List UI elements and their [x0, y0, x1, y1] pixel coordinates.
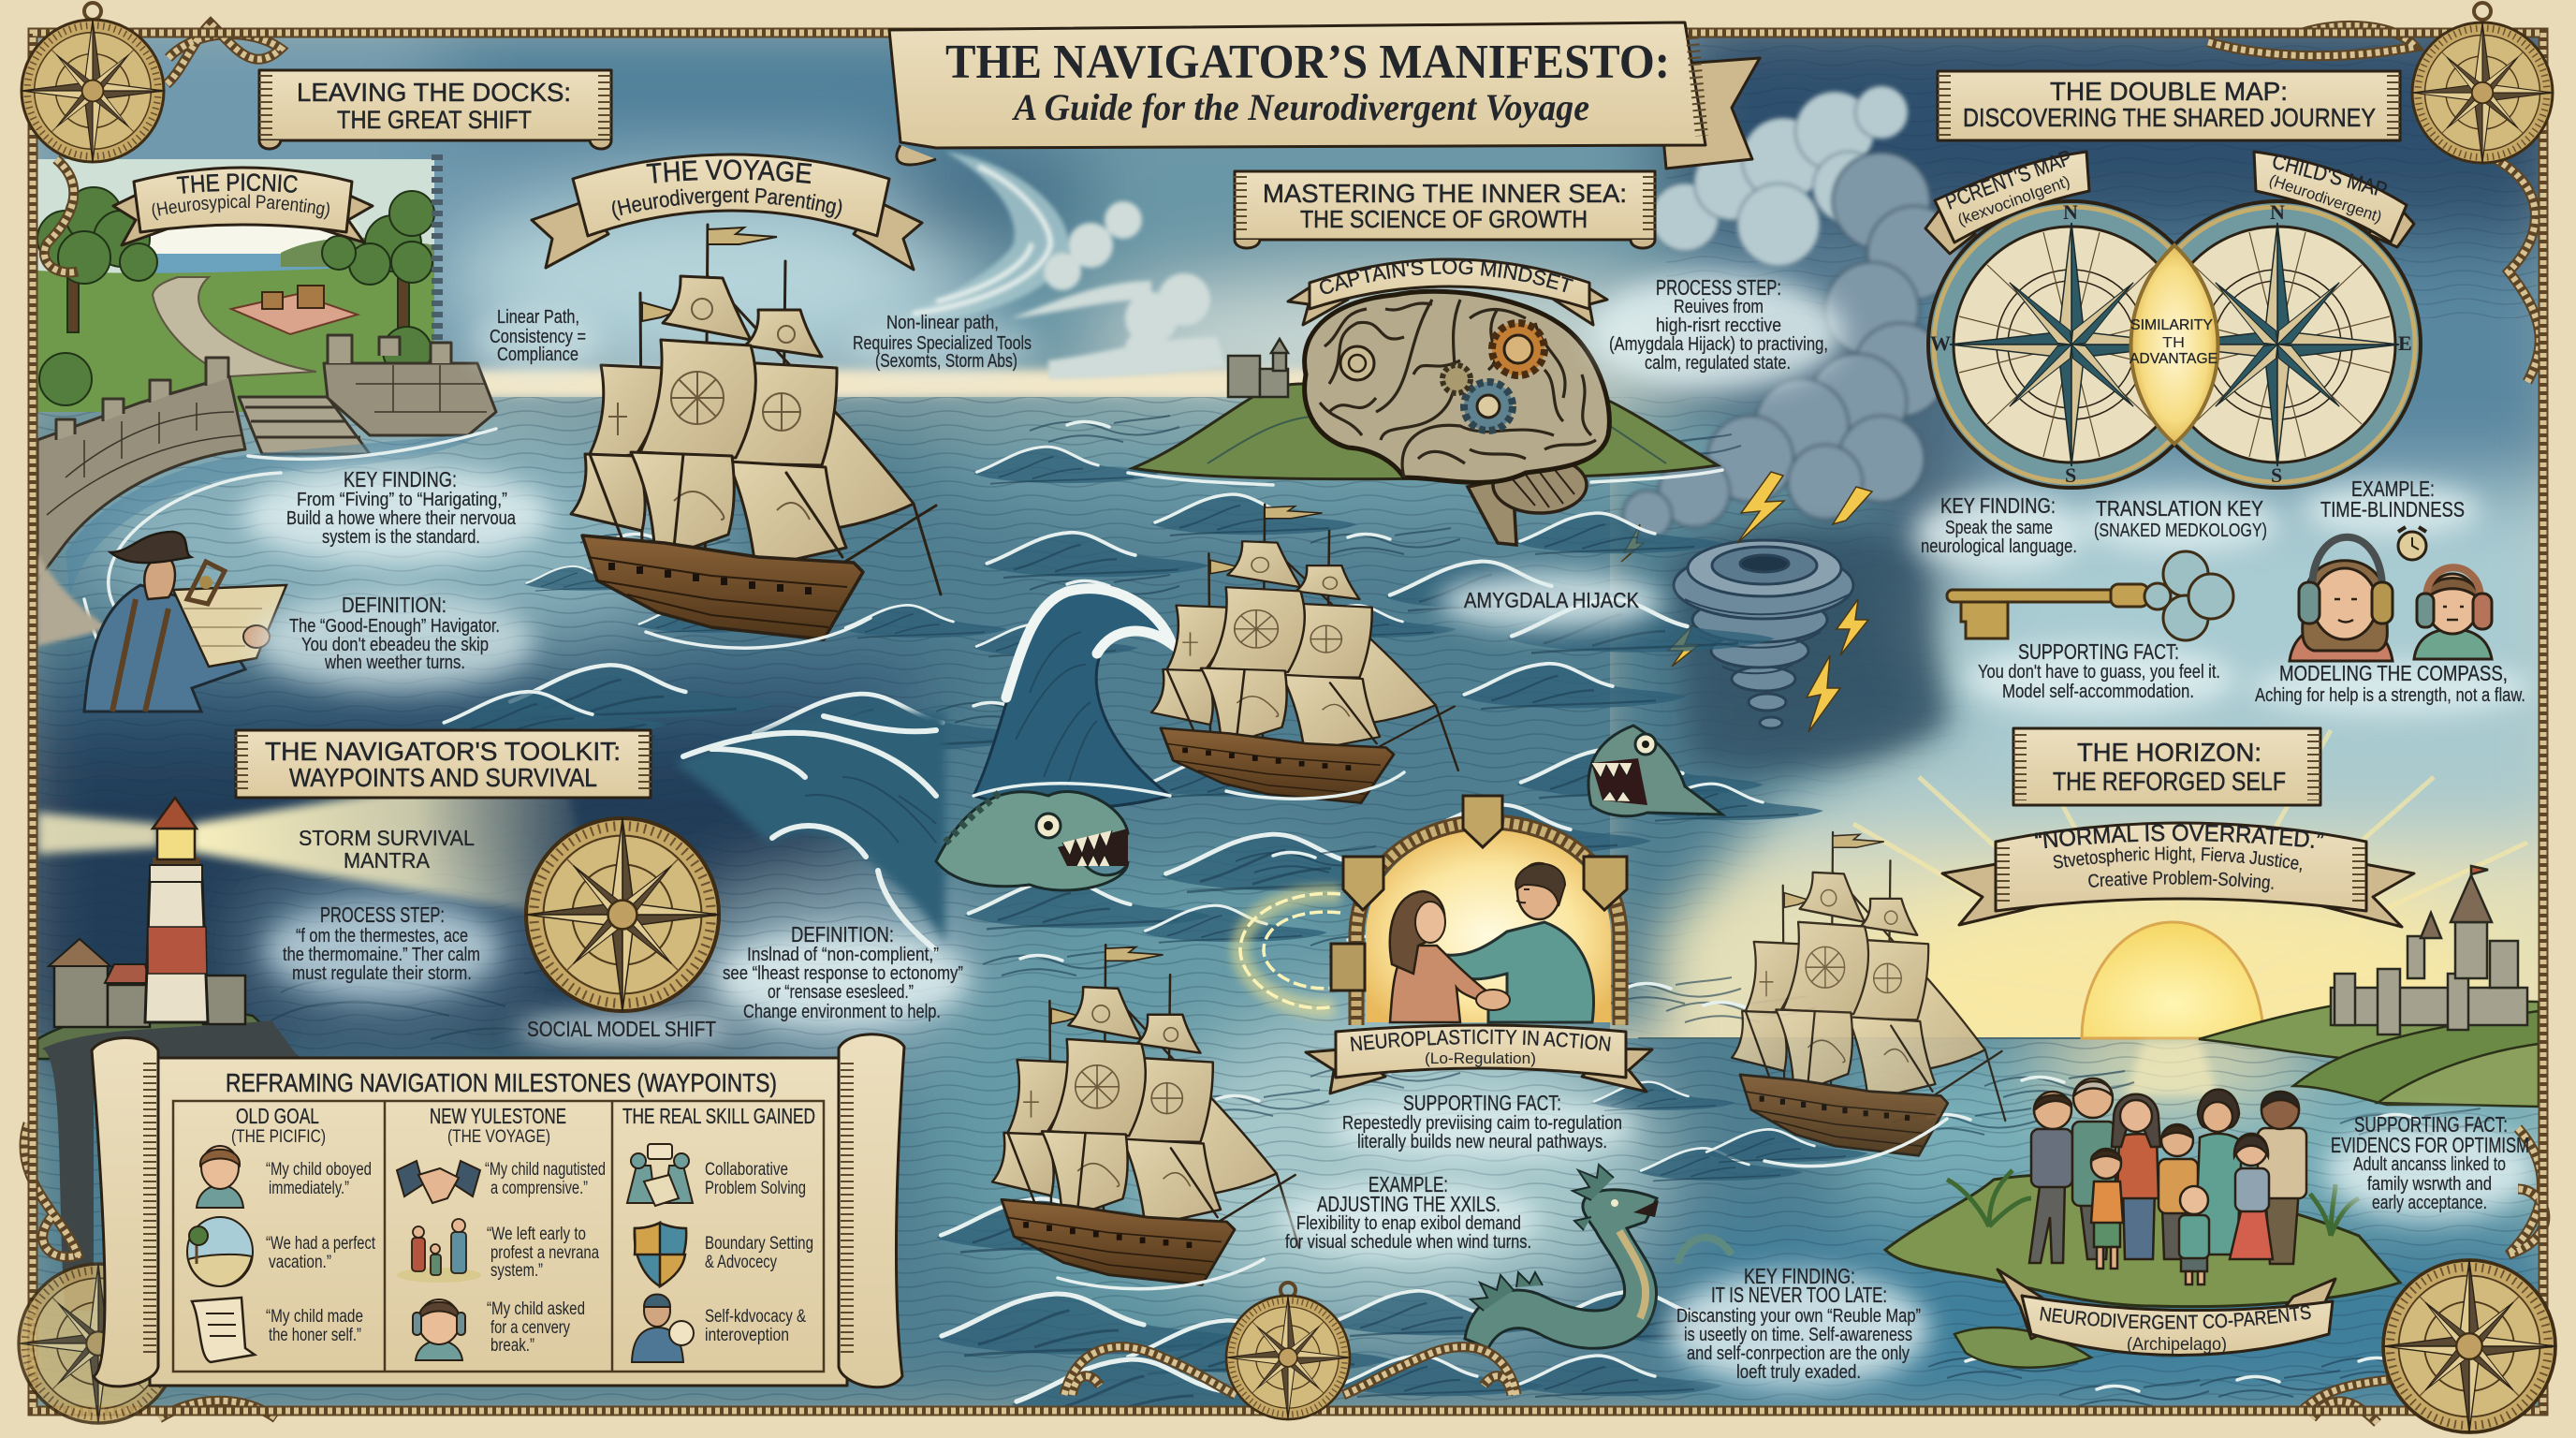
text: linear path: Linear Path,	[497, 307, 579, 328]
striped pole	[432, 154, 443, 374]
compass points: S	[2271, 463, 2282, 487]
label: social model shift: SOCIAL MODEL SHIFT	[527, 1017, 716, 1041]
island plants	[1947, 1170, 2359, 1236]
horizon glow	[440, 370, 1376, 398]
icon: island castle	[1228, 339, 1288, 397]
island: brain isle	[1128, 384, 1722, 485]
column: old goal: (THE PICIFIC)	[231, 1127, 326, 1147]
compass: bottom centre	[1226, 1283, 1350, 1419]
column: real skill gained: & Advocecy	[705, 1253, 777, 1272]
banner: neurodivergent co-parents: (Archipelago)	[2127, 1335, 2227, 1355]
text: process step, toolkit: the thermomaine.” Ther calm	[283, 945, 480, 965]
label: amygdala hijack: AMYGDALA HIJACK	[1464, 588, 1640, 612]
banner: neuroplasticity in action: (Lo-Regulation)	[1425, 1049, 1536, 1067]
column: new milestone: (THE VOYAGE)	[447, 1127, 550, 1147]
left roller	[92, 1037, 158, 1387]
ribbon: child's map	[2254, 149, 2414, 247]
ribbon: parent's map: PCRENT'S MAP	[1945, 151, 2070, 210]
text: non-linear path: Requires Specialized Tools	[853, 333, 1032, 354]
storm clouds	[1623, 153, 1961, 539]
text: supporting fact, neuroplasticity	[1342, 1091, 1622, 1152]
text: linear path: Consistency =	[490, 327, 586, 347]
text: example, adjusting the sails: EXAMPLE:	[1368, 1172, 1448, 1196]
compass: top left	[22, 3, 164, 162]
column: new milestone: “My child asked	[487, 1299, 585, 1319]
lighthouse and buildings	[37, 798, 300, 1311]
text: supporting fact, double map	[1978, 639, 2220, 702]
icon: child with headphones	[2414, 567, 2492, 659]
shore foam	[84, 429, 496, 674]
lighthouse beam	[37, 763, 599, 922]
banner: neurodivergent co-parents	[1998, 1269, 2335, 1356]
text glows	[242, 274, 2536, 1387]
trees	[37, 187, 434, 405]
text: process step, inner sea	[1609, 275, 1828, 374]
text: key finding, double map: neurological language.	[1921, 536, 2077, 557]
text: storm survival mantra	[299, 826, 475, 873]
column: real skill gained: THE REAL SKILL GAINED	[622, 1104, 815, 1128]
text: example, adjusting the sails: Flexibility to enap exibol demand	[1296, 1213, 1521, 1234]
sea monster left	[936, 791, 1128, 890]
text: translation key	[2094, 496, 2267, 541]
horizon hills	[2199, 999, 2539, 1107]
text: example, adjusting the sails: ADJUSTING THE XXILS.	[1317, 1192, 1500, 1216]
text: supporting fact, double map: Model self-accommodation.	[2002, 682, 2194, 702]
table heading: REFRAMING NAVIGATION MILESTONES (WAYPOINTS)	[226, 1068, 777, 1097]
compass points	[1930, 200, 2412, 487]
banner: navigator's toolkit	[236, 730, 651, 798]
family group	[2029, 1078, 2306, 1284]
navigator figure	[84, 532, 286, 712]
text: definition, social model	[723, 922, 963, 1022]
column: old goal: “My child made	[266, 1307, 363, 1327]
banner: captain's log mindset: CAPTAIN'S LOG MINDSET	[1316, 255, 1575, 301]
text: example, time-blindness	[2320, 477, 2465, 521]
banner: the horizon: THE REFORGED SELF	[2053, 767, 2286, 796]
column: new milestone: NEW YULESTONE	[430, 1104, 566, 1128]
text: process step, inner sea: calm, regulated state.	[1645, 353, 1791, 374]
father	[1446, 922, 1593, 1022]
text: supporting fact, double map: SUPPORTING FACT:	[2018, 639, 2179, 664]
banner: mastering the inner sea	[1235, 171, 1655, 248]
thin ripples	[505, 416, 2490, 1406]
compass points: E	[2398, 331, 2412, 355]
banner: captain's log mindset	[1288, 255, 1607, 325]
text: storm survival mantra: STORM SURVIVAL	[299, 826, 475, 850]
text: storm survival mantra: MANTRA	[344, 848, 431, 873]
compass points: N	[2270, 200, 2285, 224]
banner: the double map: DISCOVERING THE SHARED JOURNEY	[1963, 103, 2376, 132]
text: definition, social model: see “lheast response to ectonomy”	[723, 963, 963, 984]
column: old goal: vacation.”	[269, 1253, 331, 1272]
ship: lower sea	[992, 945, 1299, 1284]
column: old goal: the honer self.”	[269, 1326, 361, 1345]
sea colour wash	[0, 393, 2576, 1438]
text: key finding, double map: KEY FINDING:	[1940, 493, 2056, 518]
sea waves	[440, 445, 1868, 1421]
icon: translation key	[1947, 551, 2233, 640]
text: process step, toolkit	[283, 902, 480, 984]
text: process step, inner sea: (Amygdala Hijack) to practiving,	[1609, 334, 1828, 355]
text: linear path	[490, 307, 586, 365]
compass: social model shift	[526, 818, 719, 1011]
compass: bottom left	[19, 1264, 178, 1423]
column: new milestone	[397, 1104, 606, 1360]
icon: smiling boy	[197, 1146, 243, 1208]
compass: top right	[2412, 3, 2553, 163]
text: key finding, docks: Build a howe where their nervoua	[286, 508, 517, 529]
banner: neuroplasticity in action	[1306, 1025, 1652, 1093]
text: non-linear path: (Sexomts, Storm Abs)	[875, 351, 1017, 372]
icon: child in headphones	[413, 1299, 465, 1360]
text: definition, social model: Inslnad of “non-complient,”	[747, 945, 939, 965]
double map compasses	[1928, 200, 2421, 488]
icon: beach	[187, 1217, 253, 1286]
column: new milestone: “We left early to	[487, 1225, 586, 1244]
banner: neurodivergent co-parents: NEURODIVERGENT CO-PARENTS	[2038, 1301, 2313, 1334]
text: process step, inner sea: PROCESS STEP:	[1656, 275, 1781, 300]
ship wakes	[646, 618, 1947, 1289]
icon: collaboration	[627, 1144, 693, 1206]
text: key finding, double map	[1921, 493, 2077, 557]
sun rays	[1853, 730, 2527, 1008]
banner: the horizon: THE HORIZON:	[2077, 738, 2261, 767]
lens label	[2130, 317, 2217, 367]
neural pathway glow	[1240, 893, 1340, 1008]
text: supporting fact, optimism: Adult ancanss linked to	[2353, 1154, 2506, 1175]
brain with gears	[1305, 291, 1609, 545]
shore rock	[37, 552, 108, 646]
text: supporting fact, neuroplasticity: literally builds new neural pathways.	[1357, 1132, 1607, 1152]
text: process step, toolkit: PROCESS STEP:	[320, 902, 445, 927]
ship: horizon	[1732, 832, 2005, 1155]
banner: the horizon	[2013, 728, 2320, 805]
text: definition, navigator: when weether turns.	[324, 653, 465, 673]
text: definition, social model: or “rensase esesleed.”	[768, 982, 914, 1003]
text: process step, toolkit: must regulate their storm.	[292, 963, 472, 984]
text: key finding, docks	[286, 467, 517, 548]
text: supporting fact, optimism	[2331, 1112, 2529, 1213]
text: key finding, docks: KEY FINDING:	[344, 467, 457, 492]
sky colour wash	[37, 37, 2539, 1037]
banner: the double map	[1938, 71, 2400, 140]
text: example, time-blindness: EXAMPLE:	[2351, 477, 2435, 501]
column: new milestone: for a cenvery	[490, 1318, 570, 1338]
text: process step, toolkit: “f om the thermestes, ace	[296, 926, 468, 946]
clasped hands	[1476, 990, 1510, 1010]
column: real skill gained	[622, 1104, 815, 1362]
column: real skill gained: interoveption	[705, 1326, 789, 1345]
big curling wave	[973, 586, 1175, 809]
text: linear path: Compliance	[497, 345, 578, 365]
text: non-linear path: Non-linear path,	[886, 313, 999, 333]
picnic path	[153, 277, 316, 376]
milestones table frame	[173, 1101, 824, 1372]
text: key finding, never too late: and self-conrpection are the only	[1687, 1343, 1910, 1364]
text: key finding, never too late: IT IS NEVER TOO LATE:	[1711, 1283, 1887, 1307]
text: key finding, never too late: Discansting your own “Reuble Map”	[1676, 1306, 1921, 1327]
column: new milestone: system.”	[490, 1261, 543, 1281]
banner: leaving the docks: THE GREAT SHIFT	[337, 106, 532, 134]
title text: THE NAVIGATOR’S MANIFESTO:	[945, 36, 1670, 89]
lens label: ADVANTAGE	[2130, 351, 2217, 367]
banner: the voyage: THE VOYAGE	[646, 154, 813, 190]
compass points: W	[1930, 331, 1951, 355]
icon: family on beach	[397, 1219, 481, 1283]
text: translation key: TRANSLATION KEY	[2096, 496, 2263, 521]
text: key finding, docks: system is the standard.	[322, 527, 480, 548]
icon: report card scroll	[192, 1298, 255, 1362]
text: example, adjusting the sails	[1285, 1172, 1531, 1253]
text: modeling the compass: MODELING THE COMPASS,	[2279, 661, 2508, 685]
text: non-linear path	[853, 313, 1032, 372]
banner: mastering the inner sea: MASTERING THE INNER SEA:	[1263, 179, 1627, 208]
sky hatching	[1666, 37, 2537, 318]
ribbon: child's map: (Heurodivergent)	[2269, 174, 2381, 225]
banner: leaving the docks: LEAVING THE DOCKS:	[297, 78, 571, 107]
text: modeling the compass: Aching for help is a strength, not a flaw.	[2255, 685, 2525, 706]
family island	[1885, 1175, 2400, 1307]
text: supporting fact, neuroplasticity: SUPPORTING FACT:	[1403, 1091, 1561, 1115]
text: definition, navigator: The “Good-Enough” Havigator.	[289, 616, 500, 637]
ribbon: child's map: CHILD'S MAP	[2273, 154, 2387, 196]
column: new milestone: break.”	[490, 1336, 534, 1356]
text: process step, inner sea: high-risrt recctive	[1656, 315, 1781, 336]
horizon castle	[2331, 866, 2527, 1034]
text: definition, navigator	[289, 593, 500, 673]
subtitle text: A Guide for the Neurodivergent Voyage	[1011, 86, 1589, 128]
compass points: S	[2065, 463, 2076, 487]
picnic blanket	[231, 294, 358, 334]
column: old goal: “My child oboyed	[266, 1160, 372, 1180]
text: modeling the compass	[2255, 661, 2525, 706]
text: process step, inner sea: Reuives from	[1674, 297, 1764, 317]
column: old goal: immediately.”	[269, 1179, 349, 1198]
banner: the voyage: (Heurodivergent Parenting)	[608, 183, 845, 222]
lens label: TH	[2162, 335, 2185, 351]
arch shields	[1463, 796, 1502, 847]
overlap lens	[2130, 245, 2218, 444]
column: new milestone: a comprensive.”	[490, 1179, 588, 1198]
column: real skill gained: Self-kdvocacy &	[705, 1307, 806, 1327]
column: old goal: “We had a perfect	[266, 1234, 376, 1254]
icon: person with clock	[632, 1294, 694, 1362]
text: definition, navigator: You don't ebeadeu the skip	[301, 635, 489, 655]
scroll: reframing navigation milestones	[92, 1034, 904, 1387]
small archipelago islet	[1954, 1328, 2091, 1368]
sun reflection	[2125, 1041, 2218, 1095]
shoreline water	[66, 433, 487, 599]
text: supporting fact, optimism: early acceptance.	[2372, 1193, 2487, 1213]
wave hatching texture	[37, 397, 2539, 1408]
column: old goal	[187, 1104, 376, 1362]
clouds: centre	[1011, 201, 1226, 379]
text: supporting fact, double map: You don't have to guass, you feel it.	[1978, 662, 2220, 682]
compass points: N	[2063, 200, 2078, 224]
tornado	[1674, 540, 1853, 728]
banner: neuroplasticity in action: NEUROPLASTICITY IN ACTION	[1350, 1030, 1611, 1051]
toolkit dark sea ripples	[271, 970, 618, 1039]
banner: the picnic	[113, 168, 373, 245]
compass: bottom right	[2383, 1260, 2555, 1432]
column: new milestone: “My child nagutisted	[485, 1160, 606, 1180]
text: supporting fact, neuroplasticity: Repestedly previising caim to-regulation	[1342, 1113, 1622, 1134]
toolkit waves	[674, 712, 945, 950]
column: real skill gained: Problem Solving	[705, 1179, 806, 1198]
sea monster right	[1588, 726, 1722, 816]
text: supporting fact, optimism: family wsrwth and	[2367, 1174, 2492, 1195]
right roller	[839, 1034, 904, 1387]
text: key finding, docks: From “Fiving” to “Harigating,”	[297, 490, 507, 510]
text: key finding, never too late	[1676, 1264, 1921, 1383]
text: key finding, never too late: loeft truly exaded.	[1736, 1362, 1861, 1383]
text: translation key: (SNAKED MEDKOLOGY)	[2094, 521, 2267, 541]
text: key finding, never too late: is useetly on time. Self-awareness	[1684, 1325, 1912, 1345]
icon: shield	[635, 1223, 686, 1286]
icon: handshake	[397, 1161, 480, 1203]
neuroplasticity arch	[1240, 796, 1627, 1025]
ship: the voyage flagship	[571, 225, 941, 639]
daughter	[1390, 946, 1488, 1022]
ship: mid-storm	[1151, 505, 1458, 803]
cloud swirl	[889, 152, 1069, 321]
column: real skill gained: Collaborative	[705, 1160, 788, 1180]
text: key finding, never too late: KEY FINDING:	[1744, 1264, 1855, 1288]
banner: the voyage	[532, 154, 922, 270]
column: new milestone: profest a nevrana	[490, 1243, 599, 1263]
text: definition, navigator: DEFINITION:	[342, 593, 446, 617]
text: definition, social model: Change environment to help.	[743, 1002, 941, 1022]
text: definition, social model: DEFINITION:	[791, 922, 894, 946]
banner: normal is overrated	[1942, 820, 2414, 927]
lightning bolts	[1621, 472, 1872, 732]
banner: normal is overrated: “NORMAL IS OVERRATED.”	[2033, 820, 2325, 855]
icon: girl with headphones	[2290, 537, 2393, 661]
banner: the picnic: (Heurosypical Parenting)	[150, 192, 332, 222]
picnic baskets	[262, 286, 324, 309]
horizon line on the right	[1638, 1037, 2081, 1039]
ribbon: parent's map: (kexvocinoIgent)	[1958, 176, 2070, 227]
banner: normal is overrated: Creative Problem-Solving.	[2087, 868, 2276, 894]
banner: navigator's toolkit: THE NAVIGATOR'S TOOLKIT:	[265, 737, 621, 766]
clouds: upper right	[1651, 86, 1908, 266]
icon: alarm clock	[2398, 527, 2426, 560]
ribbon: parent's map	[1925, 145, 2089, 254]
text: supporting fact, optimism: SUPPORTING FACT:	[2354, 1112, 2508, 1137]
dock wall	[37, 335, 496, 580]
lens label: SIMILARITY	[2130, 317, 2213, 333]
text: key finding, double map: Speak the same	[1945, 518, 2053, 538]
sun	[2082, 922, 2263, 1038]
sea serpent	[1465, 1165, 1732, 1348]
picnic panel	[37, 154, 437, 412]
banner: the picnic: THE PICNIC	[176, 168, 300, 199]
text: example, time-blindness: TIME-BLINDNESS	[2320, 497, 2465, 521]
banner: mastering the inner sea: THE SCIENCE OF GROWTH	[1300, 205, 1588, 233]
column: old goal: OLD GOAL	[236, 1104, 319, 1128]
banner: leaving the docks	[259, 70, 611, 149]
banner: navigator's toolkit: WAYPOINTS AND SURVIVAL	[289, 763, 597, 792]
column: real skill gained: Boundary Setting	[705, 1234, 813, 1254]
banner: title	[889, 22, 1760, 169]
banner: normal is overrated: Stvetospheric Hight, Fierva Justice,	[2052, 844, 2305, 875]
storm dark sea	[1676, 534, 1947, 768]
text: example, adjusting the sails: for visual schedule when wind turns.	[1285, 1232, 1531, 1253]
banner: the double map: THE DOUBLE MAP:	[2050, 77, 2288, 106]
